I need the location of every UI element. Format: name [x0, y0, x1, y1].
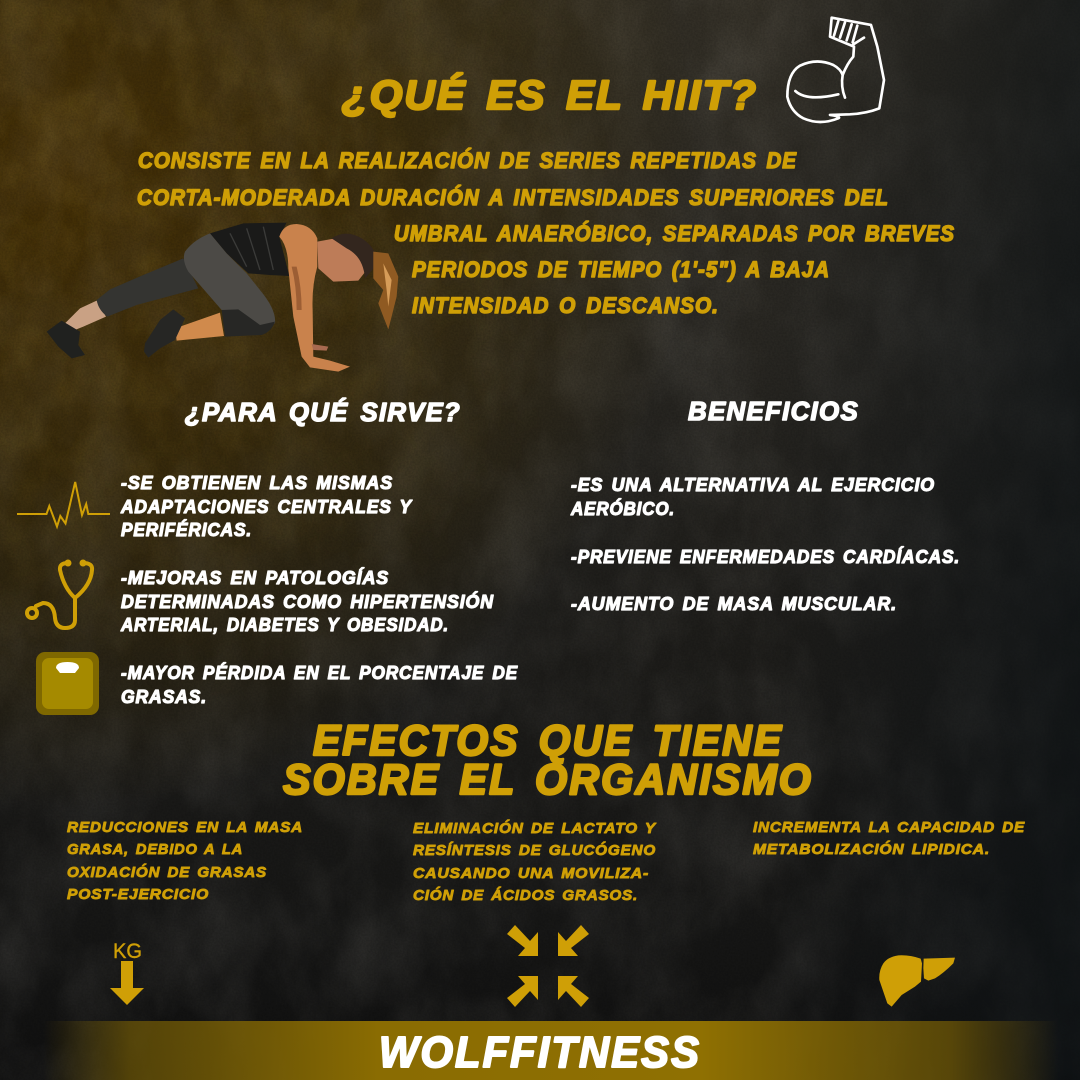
effect column 3: METABOLIZACIÓN LIPIDICA. — [753, 840, 990, 858]
photo: woman doing mountain climbers — [47, 223, 398, 372]
icon: heartbeat — [17, 482, 110, 526]
icon: liver — [879, 955, 955, 1007]
list item: patologías — [120, 567, 494, 635]
list item: patologías: DETERMINADAS COMO HIPERTENSIÓN — [121, 591, 494, 612]
list item: adaptaciones: -SE OBTIENEN LAS MISMAS — [121, 473, 393, 493]
footer brand: WOLFFITNESS — [379, 1028, 701, 1077]
list item: patologías: ARTERIAL, DIABETES Y OBESIDAD. — [120, 615, 449, 635]
intro paragraph: CONSISTE EN LA REALIZACIÓN DE SERIES REPETIDAS DE — [138, 148, 797, 173]
effect column 2 — [413, 819, 657, 904]
effect column 2: ELIMINACIÓN DE LACTATO Y — [413, 819, 657, 837]
list: beneficios: AERÓBICO. — [570, 498, 675, 519]
effect column 1: GRASA, DEBIDO A LA — [67, 841, 243, 858]
icon: kg down arrow: KG — [113, 940, 142, 963]
intro paragraph: CORTA-MODERADA DURACIÓN A INTENSIDADES SUPERIORES DEL — [137, 185, 889, 210]
heading: para qué sirve: ¿PARA QUÉ SIRVE? — [185, 397, 461, 427]
list item: grasas — [121, 662, 518, 707]
heading: beneficios: BENEFICIOS — [688, 396, 859, 426]
list item: adaptaciones — [120, 473, 413, 540]
heading: efectos: EFECTOS QUE TIENE — [313, 717, 783, 765]
list: beneficios: -PREVIENE ENFERMEDADES CARDÍACAS. — [571, 546, 960, 567]
list: beneficios — [570, 475, 960, 614]
icon: flexed arm — [787, 18, 884, 122]
icon: weighing scale — [36, 652, 99, 715]
intro paragraph: INTENSIDAD O DESCANSO. — [412, 293, 719, 318]
intro paragraph: UMBRAL ANAERÓBICO, SEPARADAS POR BREVES — [394, 221, 955, 246]
effect column 3 — [753, 819, 1025, 858]
icon: stethoscope — [27, 562, 92, 628]
list item: adaptaciones: ADAPTACIONES CENTRALES Y — [120, 497, 413, 517]
list: beneficios: -ES UNA ALTERNATIVA AL EJERCICIO — [571, 475, 935, 495]
list item: patologías: -MEJORAS EN PATOLOGÍAS — [121, 567, 389, 588]
icon: kg down arrow — [110, 940, 144, 1005]
title: ¿QUÉ ES EL HIIT? — [342, 72, 758, 118]
list: beneficios: -AUMENTO DE MASA MUSCULAR. — [571, 594, 897, 614]
intro paragraph: PERIODOS DE TIEMPO (1'-5") A BAJA — [412, 257, 830, 282]
intro paragraph — [137, 148, 955, 318]
effect column 1: POST-EJERCICIO — [67, 886, 209, 903]
heading: efectos: SOBRE EL ORGANISMO — [283, 756, 813, 804]
effect column 1: REDUCCIONES EN LA MASA — [67, 819, 303, 836]
effect column 3: INCREMENTA LA CAPACIDAD DE — [753, 819, 1025, 836]
list item: grasas: GRASAS. — [121, 687, 207, 707]
list item: adaptaciones: PERIFÉRICAS. — [121, 519, 252, 540]
effect column 2: CAUSANDO UNA MOVILIZA- — [413, 865, 649, 882]
list item: grasas: -MAYOR PÉRDIDA EN EL PORCENTAJE DE — [121, 662, 518, 683]
effect column 1 — [67, 819, 303, 903]
heading: efectos — [283, 717, 813, 804]
effect column 2: RESÍNTESIS DE GLUCÓGENO — [413, 841, 656, 859]
footer band — [0, 1021, 1080, 1080]
effect column 1: OXIDACIÓN DE GRASAS — [67, 863, 267, 881]
icon: compress arrows — [507, 925, 589, 1007]
effect column 2: CIÓN DE ÁCIDOS GRASOS. — [413, 886, 638, 904]
